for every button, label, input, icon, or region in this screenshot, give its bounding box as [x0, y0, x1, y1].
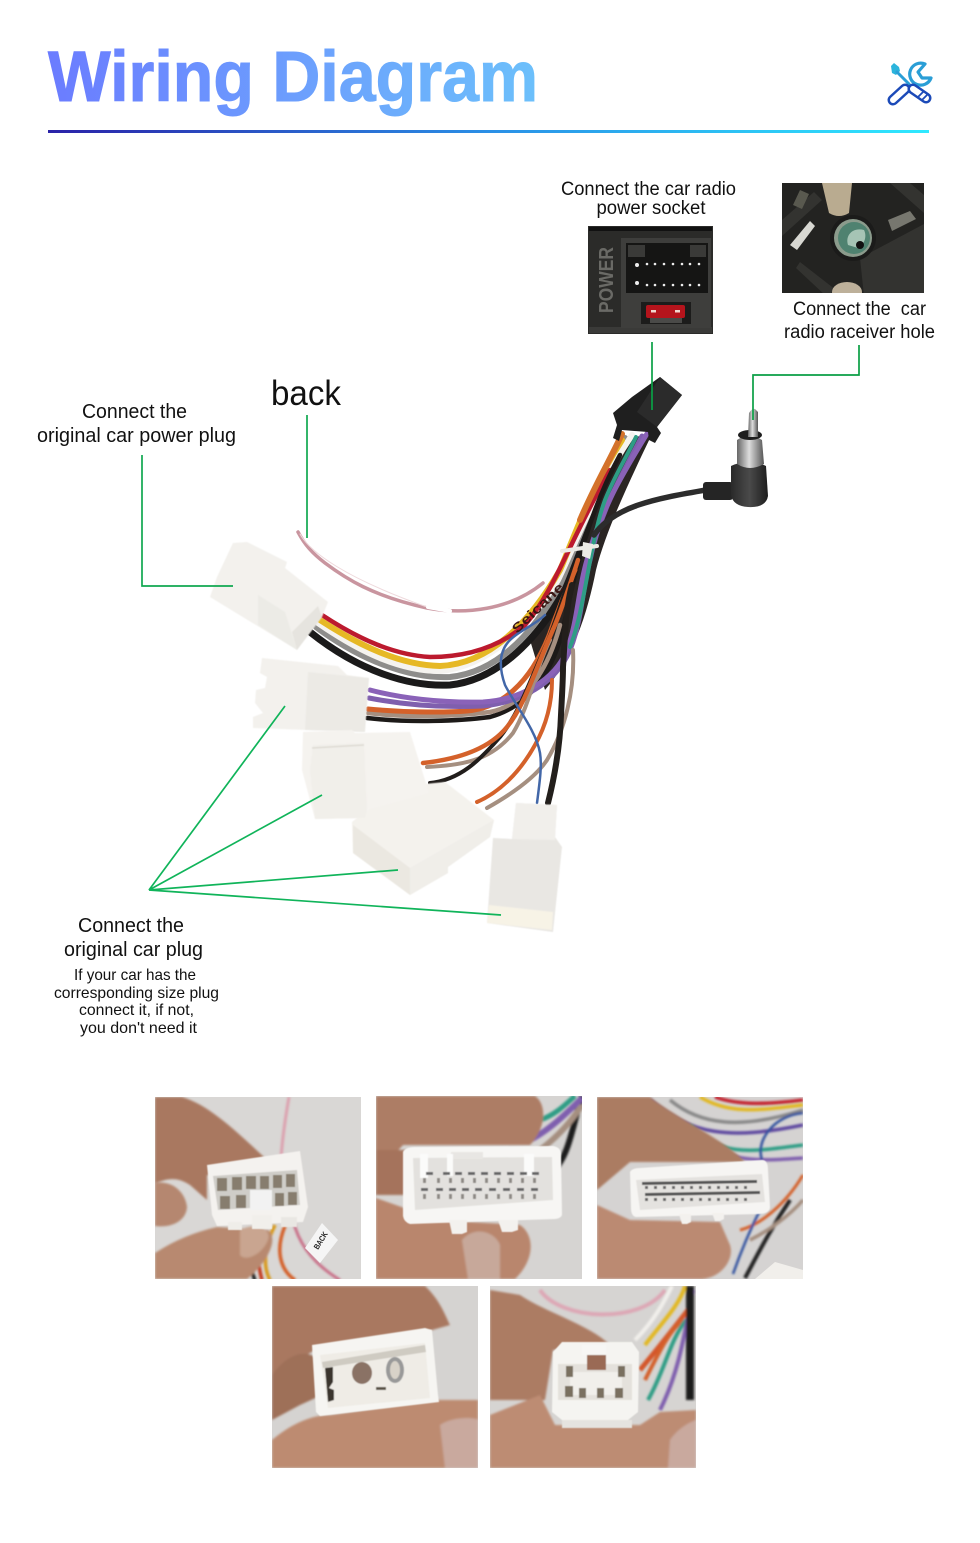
label: original car power plug	[37, 401, 236, 447]
label: original car power plug: Connect the	[82, 401, 187, 423]
photo: connector five in hand	[490, 1286, 696, 1468]
back wire	[298, 532, 543, 611]
wires: connector four group	[477, 650, 573, 808]
title: Wiring Diagram	[48, 38, 538, 117]
photo: connector two in hand	[376, 1096, 582, 1279]
label: receiver hole: Connect the car	[793, 299, 927, 320]
antenna cable	[594, 490, 706, 535]
label: original car plug: Connect the	[78, 915, 184, 937]
wiring harness	[298, 432, 706, 808]
photo: radio receiver hole	[782, 183, 924, 302]
trunk filler	[530, 434, 652, 690]
label: original car plug	[54, 915, 219, 1037]
wires: connector five group	[501, 585, 572, 803]
top power connector	[613, 377, 682, 443]
back tag	[305, 1223, 338, 1263]
label: power socket: Connect the car radio	[561, 179, 736, 200]
back tag: BACK	[312, 1230, 330, 1251]
photo: radio power socket: POWER	[596, 247, 618, 313]
cable tie	[562, 542, 597, 559]
label: power socket: power socket	[596, 198, 706, 219]
callout lines	[142, 342, 859, 915]
label: back: back	[271, 374, 341, 413]
label: original car power plug: original car power plug	[37, 425, 236, 447]
wires: connector three group	[423, 560, 578, 783]
label: original car plug: you don't need it	[80, 1020, 198, 1037]
label: receiver hole: radio raceiver hole	[784, 322, 935, 343]
label: original car plug: original car plug	[64, 939, 203, 961]
wires: power plug group	[310, 434, 632, 685]
photo: connector one in hand	[155, 1097, 361, 1280]
label: receiver hole	[784, 299, 935, 343]
brand print on harness: Seicane	[509, 580, 567, 636]
label: original car plug: If your car has the	[74, 967, 196, 984]
icon: crossed screwdriver and wrench	[891, 63, 931, 100]
label: power socket	[561, 179, 736, 219]
title underline	[48, 130, 929, 133]
connector: five	[487, 803, 562, 932]
label: original car plug: connect it, if not,	[79, 1002, 194, 1019]
label: original car plug: corresponding size plug	[54, 985, 219, 1002]
connector: three	[302, 730, 429, 819]
photo: connector three in hand	[597, 1097, 803, 1279]
connector: two	[253, 658, 369, 732]
wires: connector two group	[367, 432, 648, 721]
connector: power plug	[210, 542, 328, 650]
photo: connector four in hand	[272, 1286, 478, 1468]
photo: radio power socket	[588, 226, 713, 334]
antenna plug	[703, 409, 768, 507]
connector: four	[352, 782, 494, 895]
